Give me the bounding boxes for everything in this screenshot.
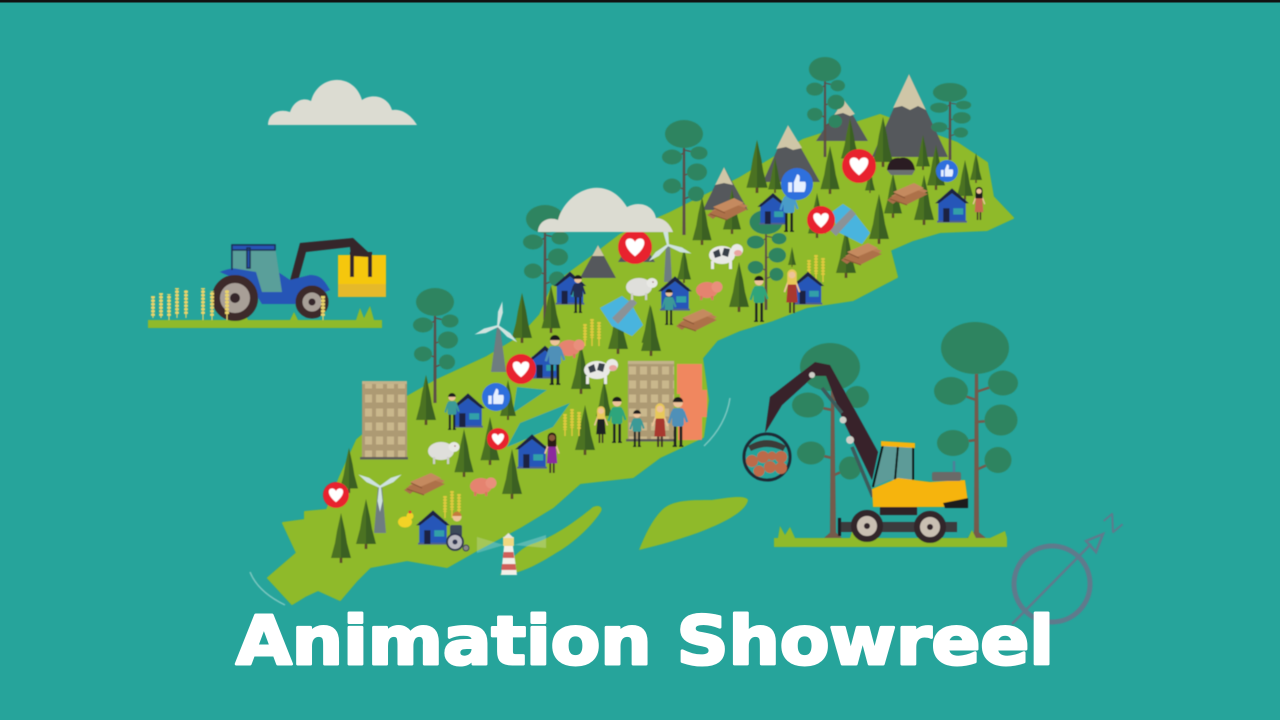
crane arm xyxy=(765,362,878,480)
tractor body xyxy=(220,268,330,304)
houses xyxy=(416,188,969,545)
apartment buildings xyxy=(360,361,676,460)
stacked orange envelopes xyxy=(677,364,707,440)
ground strip xyxy=(774,538,1007,547)
pine trees xyxy=(331,117,982,563)
cloud: over island xyxy=(538,188,673,232)
compass xyxy=(1012,508,1128,624)
tall trees on the island xyxy=(413,57,971,403)
farm animals xyxy=(398,244,743,528)
hay bale xyxy=(338,255,386,297)
coal heap xyxy=(887,158,915,175)
tractor cab xyxy=(232,246,282,292)
map: inland water channels xyxy=(507,387,570,447)
wheat field xyxy=(153,288,323,320)
mountains xyxy=(580,74,948,278)
waterfalls and dams xyxy=(600,204,870,336)
lighthouse with beams xyxy=(477,533,546,575)
ground strip xyxy=(148,320,382,328)
map: main island xyxy=(268,115,1013,604)
rear wheel xyxy=(216,279,254,317)
harvester scene with trees xyxy=(744,322,1018,547)
coast wave marks xyxy=(250,398,730,605)
wheat patches on the island xyxy=(445,255,823,518)
title: Animation Showreel xyxy=(236,602,1054,680)
cloud: upper left xyxy=(268,80,417,125)
tractor with hay bale xyxy=(148,238,386,328)
grapple with logs xyxy=(744,434,790,480)
reaction icons: hearts xyxy=(323,149,876,508)
left tall tree xyxy=(792,343,869,538)
machine body xyxy=(872,478,968,507)
windmills xyxy=(356,216,693,533)
tractor arm xyxy=(287,238,368,292)
front wheel xyxy=(299,289,325,315)
map: long south island xyxy=(500,506,602,575)
wheels xyxy=(854,513,880,539)
reaction icons: likes xyxy=(482,160,958,411)
people xyxy=(445,186,985,551)
cab xyxy=(873,445,913,487)
log piles xyxy=(404,183,928,495)
right tall tree xyxy=(934,322,1018,538)
compass: Z xyxy=(1099,508,1128,538)
chassis xyxy=(880,507,917,515)
map: east islet xyxy=(639,497,748,550)
map artwork xyxy=(148,57,1128,624)
